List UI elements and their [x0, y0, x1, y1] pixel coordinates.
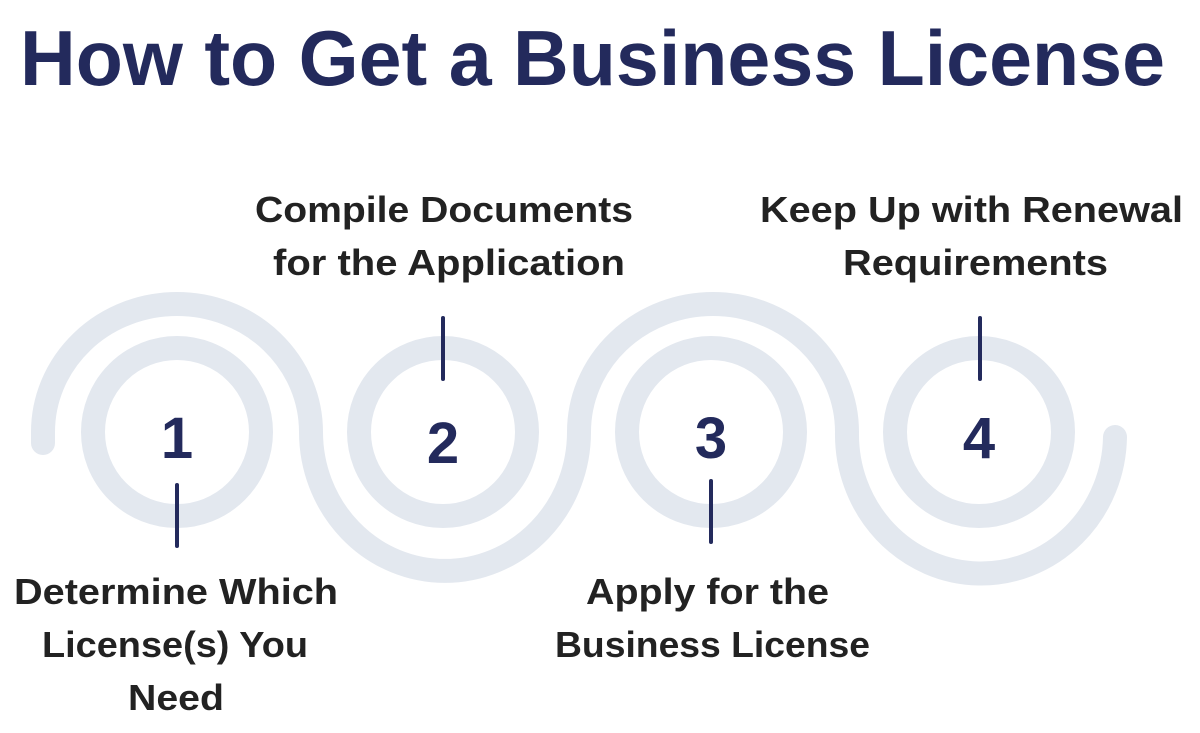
step 1 ring: [93, 348, 261, 546]
step 3 ring: 3: [695, 406, 727, 471]
step 2 ring: [359, 318, 527, 516]
step 4 ring: [895, 318, 1063, 516]
label 3: Apply for the: [586, 571, 829, 612]
label 1: Determine Which: [14, 571, 338, 612]
step 3 ring: [627, 348, 795, 542]
label 1: Need: [128, 677, 224, 718]
label 1: [14, 571, 338, 718]
label 3: Business License: [555, 624, 870, 665]
title: How to Get a Business License: [20, 14, 1165, 102]
label 3: [555, 571, 870, 665]
label 2: [255, 189, 633, 283]
wave path: [43, 304, 1115, 574]
step 4 ring: 4: [963, 406, 995, 471]
label 2: for the Application: [273, 242, 625, 283]
label 4: [760, 189, 1183, 283]
label 1: License(s) You: [42, 624, 308, 665]
step 2 ring: 2: [427, 411, 459, 476]
label 4: Keep Up with Renewal: [760, 189, 1183, 230]
step 1 ring: 1: [161, 406, 193, 471]
label 2: Compile Documents: [255, 189, 633, 230]
label 4: Requirements: [843, 242, 1108, 283]
